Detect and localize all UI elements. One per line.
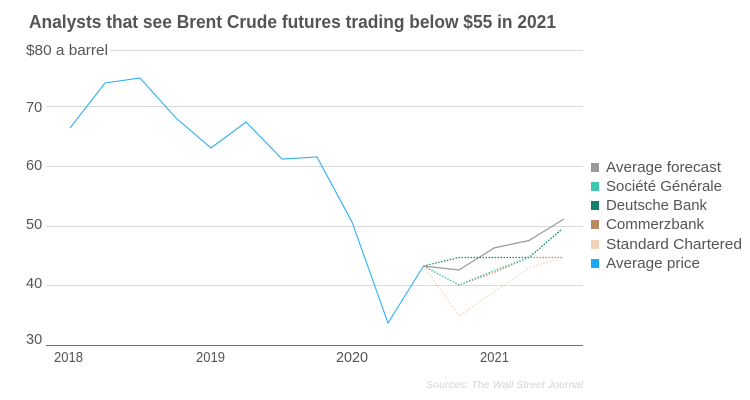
y axis labels: 30 [26, 332, 42, 348]
legend [591, 160, 742, 272]
x axis baseline [46, 344, 583, 346]
y axis labels: $80 a barrel [26, 43, 108, 59]
line: societe generale forecast [424, 229, 562, 285]
line: standard chartered forecast [424, 258, 562, 316]
y axis labels: 70 [26, 100, 42, 116]
line: deutsche bank forecast [424, 229, 562, 266]
y axis labels: 40 [26, 276, 42, 292]
line: average price [70, 78, 424, 323]
x axis labels: 2018 [54, 350, 83, 366]
legend: average price: Average price [606, 256, 700, 272]
legend: average forecast: Average forecast [606, 160, 721, 176]
x axis labels [54, 350, 509, 366]
x axis labels: 2020 [336, 350, 368, 366]
y axis labels [26, 43, 108, 348]
source note: Sources: The Wall Street Journal [426, 379, 584, 391]
line: average forecast [424, 219, 564, 270]
line: commerzbank forecast [424, 258, 562, 285]
y axis labels: 60 [26, 158, 42, 174]
legend: commerzbank: Commerzbank [606, 217, 705, 233]
legend: standard chartered: Standard Chartered [606, 237, 742, 253]
y axis labels: 50 [26, 217, 42, 233]
x axis labels: 2021 [480, 350, 509, 366]
x axis labels: 2019 [196, 350, 225, 366]
legend: societe generale: Société Générale [606, 179, 722, 195]
legend: deutsche bank: Deutsche Bank [606, 198, 708, 214]
title: Analysts that see Brent Crude futures trading below $55 in 2021 [29, 11, 556, 32]
